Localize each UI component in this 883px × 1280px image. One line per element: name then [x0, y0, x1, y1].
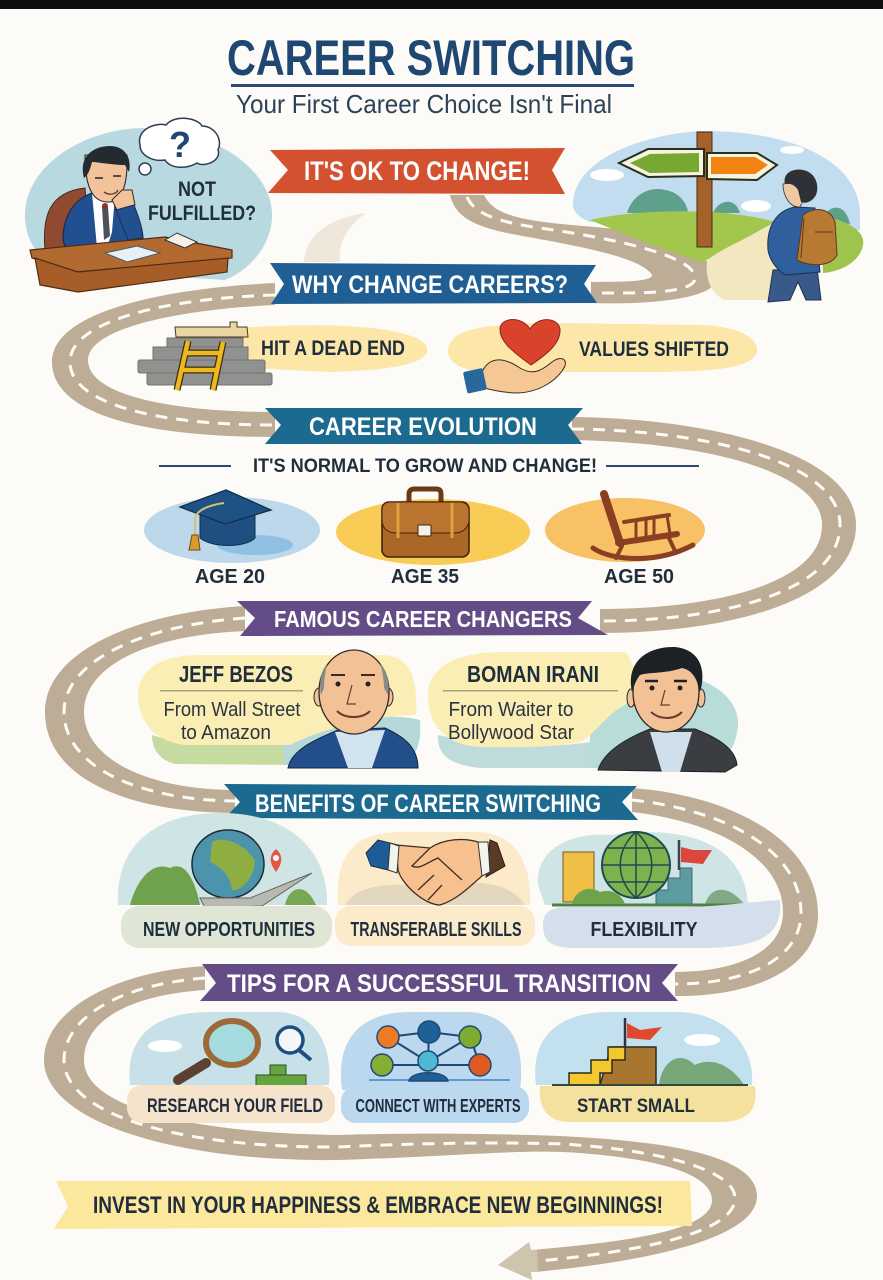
icon: handshake: [366, 840, 505, 905]
panel: hit a dead end: [138, 322, 427, 390]
icon: graduation cap: [180, 490, 271, 550]
title: [227, 30, 635, 119]
text: bezos: [160, 661, 303, 744]
banner: why change careers: [270, 263, 597, 304]
banner: why change careers: WHY CHANGE CAREERS?: [292, 271, 568, 299]
label: FLEXIBILITY: [590, 918, 698, 941]
label: NEW OPPORTUNITIES: [143, 918, 315, 941]
banner: tips: [200, 964, 678, 1001]
text: not fulfilled: NOT: [178, 178, 216, 201]
icon: magnifiers: [178, 1021, 311, 1086]
text: not fulfilled: [148, 178, 256, 225]
panel: boman irani: [428, 647, 738, 772]
banner: closing message: [54, 1181, 692, 1229]
icon: network: [369, 1021, 510, 1081]
panel: age 50: [545, 494, 705, 588]
label: [127, 1085, 335, 1123]
panel: age 20: [144, 490, 320, 588]
panel: transferable skills: [335, 832, 535, 946]
subtitle: normal to grow: IT'S NORMAL TO GROW AND CHANGE!: [253, 455, 597, 477]
icon: irani portrait: [598, 647, 737, 772]
label: [543, 900, 780, 948]
label: [540, 1086, 756, 1122]
arrow: road end: [498, 1242, 538, 1280]
panel: not fulfilled: [25, 118, 272, 292]
icon: heart in hand: [463, 320, 565, 394]
icon: globe and flag: [552, 832, 750, 905]
panel: age 35: AGE 35: [391, 566, 459, 588]
panel: values shifted: [448, 320, 757, 394]
label: CONNECT WITH EXPERTS: [356, 1096, 520, 1116]
banner: career evolution: CAREER EVOLUTION: [309, 413, 537, 441]
text: bezos: From Wall Street: [164, 699, 301, 721]
label: TRANSFERABLE SKILLS: [350, 919, 522, 941]
text: irani: [443, 661, 618, 744]
icon: thought bubble: ?: [169, 124, 191, 165]
title: CAREER SWITCHING: [227, 30, 635, 86]
panel: start small: [535, 1012, 756, 1122]
banner: benefits: BENEFITS OF CAREER SWITCHING: [255, 790, 601, 818]
icon: man at desk: [44, 146, 143, 250]
label: [341, 1086, 529, 1123]
label: [335, 906, 535, 946]
panel: connect with experts: [341, 1012, 529, 1123]
icon: signpost: [619, 132, 777, 247]
banner: closing message: INVEST IN YOUR HAPPINESS & EMBRACE NEW BEGINNINGS!: [93, 1192, 663, 1219]
icon: thought bubble: [139, 118, 220, 175]
winding road: [44, 195, 856, 1272]
text: bezos: to Amazon: [181, 722, 271, 744]
icon: briefcase: [382, 489, 469, 557]
panel: age 20: AGE 20: [195, 566, 265, 588]
text: not fulfilled: FULFILLED?: [148, 202, 256, 225]
banner: famous career changers: [237, 601, 608, 636]
icon: brick wall and ladder: [138, 322, 272, 390]
banner: famous career changers: FAMOUS CAREER CHANGERS: [274, 606, 572, 632]
panel: age 35: [336, 489, 530, 588]
panel: flexibility: [538, 832, 780, 948]
panel: age 50: AGE 50: [604, 566, 674, 588]
banner: it's ok to change: IT'S OK TO CHANGE!: [304, 156, 530, 186]
title: Your First Career Choice Isn't Final: [236, 89, 612, 119]
panel: hit a dead end: HIT A DEAD END: [261, 337, 405, 360]
icon: bezos portrait: [288, 650, 418, 768]
label: START SMALL: [577, 1096, 695, 1117]
banner: tips: TIPS FOR A SUCCESSFUL TRANSITION: [227, 970, 651, 998]
banner: career evolution: [265, 408, 583, 444]
panel: research your field: [127, 1012, 335, 1123]
banner: it's ok to change: [268, 148, 565, 194]
icon: globe: [130, 830, 316, 908]
panel: new opportunities: [118, 813, 332, 948]
label: RESEARCH YOUR FIELD: [147, 1096, 323, 1117]
label: [121, 906, 332, 948]
text: bezos: JEFF BEZOS: [179, 661, 293, 687]
icon: stairs and flag: [552, 1018, 748, 1085]
panel: jeff bezos: [138, 650, 420, 768]
icon: rocking chair: [593, 494, 693, 559]
icon: desk: [30, 233, 232, 292]
text: irani: Bollywood Star: [448, 722, 574, 744]
text: irani: From Waiter to: [448, 699, 574, 721]
panel: signpost scene: [573, 131, 863, 302]
text: irani: BOMAN IRANI: [467, 661, 599, 687]
banner: benefits: [224, 784, 638, 820]
icon: hiker: [768, 170, 837, 302]
panel: values shifted: VALUES SHIFTED: [579, 338, 729, 361]
